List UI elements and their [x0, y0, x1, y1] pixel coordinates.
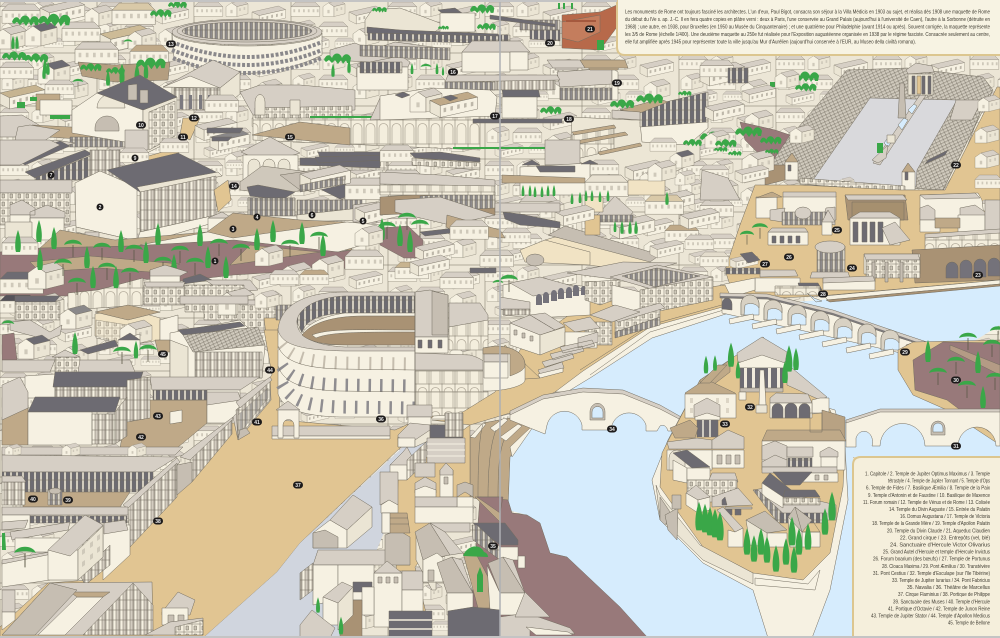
tree clusters north-west [2, 1, 187, 119]
Trastevere bank [898, 340, 1000, 445]
monument number markers: 28 [820, 292, 826, 298]
hilltop trees east [610, 72, 819, 152]
monument number markers: 1 [214, 259, 217, 265]
monument number markers: 17 [492, 114, 498, 120]
west-central city and hill [255, 197, 514, 289]
text panel: legend: 22. Grand cirque / 23. Entrepôts (vel, blé) [900, 535, 990, 541]
monument number markers: 26 [786, 255, 792, 261]
text panel: legend: 45. Temple de Bellone [948, 621, 990, 627]
monument number markers: 16 [450, 70, 456, 76]
monument number markers: 23 [975, 273, 981, 279]
wing wall [812, 398, 829, 414]
tan-roofed building west [685, 365, 736, 418]
Ile Tiberine [652, 337, 848, 638]
island hull [652, 345, 848, 638]
Pont Fabricius bridge [510, 388, 683, 434]
Colisee amphitheatre [172, 19, 322, 73]
Capitoline trees [15, 220, 328, 295]
monument number markers: 36 [378, 417, 384, 423]
monument number markers: 3 [232, 227, 235, 233]
monument number markers: 22 [953, 163, 959, 169]
Portique d'Octavie complex [2, 372, 272, 630]
monument number markers: 10 [138, 123, 144, 129]
island cypresses [695, 343, 836, 573]
monument number markers: 42 [138, 435, 144, 441]
monument number markers: 41 [254, 420, 260, 426]
north-east wing [787, 368, 827, 400]
Porticus gate and wall [272, 401, 390, 439]
monument number markers: 29 [902, 350, 908, 356]
Temples 4 6 and Basilica Aemilia [240, 166, 377, 222]
obelisk [756, 370, 767, 413]
city slope between Palatine and circus [655, 60, 799, 217]
monument number markers: 7 [50, 173, 53, 179]
monument number markers: 6 [311, 213, 314, 219]
houses on the diagonal [380, 413, 473, 533]
monument number markers: 14 [231, 184, 237, 190]
monument number markers: 38 [155, 519, 161, 525]
Theatre de Marcellus [278, 290, 488, 425]
monument number markers: 39 [65, 498, 71, 504]
monument number markers: 5 [362, 219, 365, 225]
monument number markers: 33 [722, 422, 728, 428]
bottom-left sand field of Circus Flaminius [0, 330, 440, 638]
text panel: legend [853, 457, 1000, 638]
monument number markers: 45 [160, 352, 166, 358]
market and warehouses block [500, 262, 713, 380]
temple of Jupiter Iurarius [694, 398, 720, 437]
Temple de Venus et de Rome [163, 60, 240, 110]
western buildings [667, 420, 753, 547]
monument number markers: 25 [834, 228, 840, 234]
Palatine palaces and Temple 19 [380, 60, 620, 123]
monument number markers: 15 [287, 135, 293, 141]
monument number markers: 32 [747, 405, 753, 411]
monument number markers: 27 [762, 262, 768, 268]
far-city trees north [324, 3, 573, 115]
Buildings below Capitoline [0, 265, 329, 372]
monument number markers: 37 [295, 483, 301, 489]
monument number markers: 2 [99, 205, 102, 211]
house B [300, 563, 353, 638]
Forum buildings [0, 95, 249, 168]
south bank of forum boarium river wall [807, 280, 1000, 302]
monument number markers: 35 [490, 544, 496, 550]
monument number markers: 34 [609, 427, 615, 433]
monument number markers: 18 [566, 117, 572, 123]
city blocks above market [495, 160, 719, 272]
Palatine arcaded substructure [240, 85, 545, 170]
arched building east [770, 393, 812, 418]
tower house [374, 561, 423, 627]
Tiber river water [508, 285, 1000, 638]
far city: north-west quarter [0, 0, 170, 240]
monument number markers: 24 [849, 266, 855, 272]
monument number markers: 9 [134, 156, 137, 162]
buildings below the circus [700, 192, 1000, 300]
Entree du Palatin arch [241, 137, 380, 180]
Transtevere shore south of Navalia [448, 497, 648, 638]
Middle city west of Palatine [300, 145, 495, 224]
monument number markers: 44 [267, 368, 273, 374]
Temple de Jupiter Optimus Maximus [75, 153, 243, 246]
temple of Aesculapius [737, 337, 787, 400]
bottom-left hall [2, 582, 203, 635]
Pont Aemilius bridge [720, 293, 960, 360]
Basilique de Maxence [72, 75, 177, 153]
sand forum boarium area [725, 87, 1000, 300]
house block A [313, 495, 410, 605]
south buildings on grey strip [300, 413, 575, 638]
monument number markers: 30 [953, 378, 959, 384]
vertical fold line [499, 0, 501, 638]
text panel: legend: 24. Sanctuaire d'Hercule Victor Olivarius [890, 542, 990, 548]
monument number markers: 13 [168, 42, 174, 48]
grey paved strip [203, 440, 430, 638]
monument number markers: 19 [614, 81, 620, 87]
Hilltop buildings south-east of Palatine [540, 92, 708, 195]
text panel: legend: 35. Navalia / 36. Théâtre de Marcellus [907, 585, 990, 591]
monument number markers: 40 [30, 497, 36, 503]
monument number markers [28, 26, 983, 550]
monument number markers: 4 [256, 215, 259, 221]
north river bank embankment [432, 285, 738, 425]
monument number markers: 12 [191, 116, 197, 122]
text panel: introduction [617, 0, 1000, 55]
Aqueduc Claudien brick ruin [562, 5, 617, 50]
island ground [660, 337, 845, 580]
monument number markers: 21 [587, 27, 593, 33]
Trastevere trees [925, 326, 1000, 408]
Marcellus curved wing [483, 346, 525, 391]
monument number markers: 31 [953, 444, 959, 450]
Circus Maximus [765, 63, 993, 192]
trees mid city [522, 185, 669, 234]
Temple de Bellone [170, 320, 265, 378]
tan and slate yard [472, 497, 525, 568]
monument number markers: 20 [547, 41, 553, 47]
Navalia arches [470, 418, 533, 507]
far city north: temple of Claudius and porticoes [330, 8, 628, 90]
monument number markers: 43 [155, 414, 161, 420]
Pont Cestius bridge [846, 409, 1000, 447]
Capitoline slope and cream retaining wall [0, 213, 380, 310]
text panel: introduction: elle fut amplifiée après 1945 pour représenter toute la ville jusqu'au Mur d'Aurélien (aujourd'hui conservée à l'EUR, au Museo della civiltà romana). [625, 40, 916, 46]
houses E F G [415, 523, 575, 638]
sand lanes [396, 425, 470, 638]
eastern buildings [746, 410, 846, 547]
monument number markers: 11 [180, 135, 186, 141]
green pine by market [493, 275, 518, 292]
